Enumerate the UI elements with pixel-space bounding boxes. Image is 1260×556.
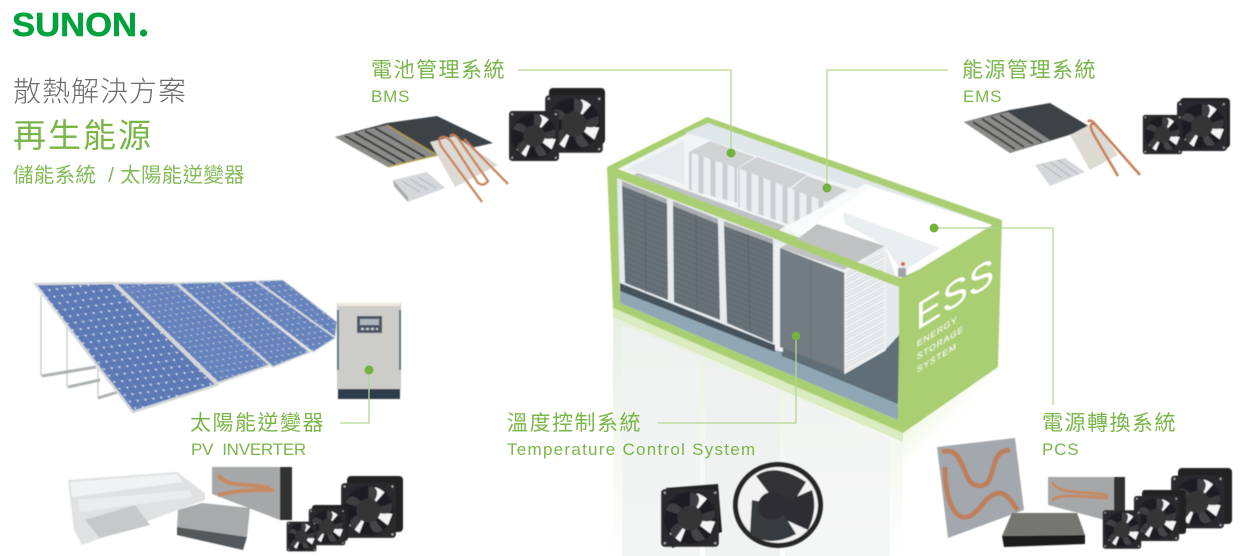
container roof opening: white interior — [617, 123, 992, 278]
right room — [775, 184, 992, 352]
small device — [898, 268, 906, 277]
BMS components — [335, 116, 508, 202]
inverter unit — [337, 303, 401, 399]
inverter dot — [364, 366, 374, 374]
inverter body — [337, 303, 401, 390]
BMS dot — [726, 148, 736, 158]
title block — [13, 76, 245, 187]
EMS dot — [822, 184, 832, 192]
temperature control fans — [661, 462, 823, 548]
temperature control label — [507, 332, 800, 459]
inverter base — [338, 389, 400, 399]
partition wall — [785, 184, 870, 235]
logo: SUNON: SUNON — [12, 6, 137, 43]
PCS english label: PCS — [1042, 440, 1079, 459]
support frame — [41, 295, 118, 398]
floor — [620, 290, 898, 420]
PCS chinese heading: 電源轉換系統 — [1042, 412, 1177, 435]
heat sink — [177, 503, 250, 537]
battery plate — [335, 116, 493, 167]
SYSTEM: SYSTEM — [917, 341, 957, 375]
ENERGY: ENERGY — [917, 314, 958, 349]
ESS label — [916, 247, 995, 375]
front opening — [617, 178, 899, 420]
temperature control cabinet — [780, 224, 885, 373]
BMS chinese heading: 電池管理系統 — [371, 59, 506, 82]
PCS fans — [1103, 468, 1232, 549]
panel 4 — [222, 281, 335, 352]
square fan — [666, 484, 722, 548]
rack 2 — [673, 205, 720, 320]
PCS dot — [930, 224, 938, 232]
back server racks — [689, 141, 847, 225]
reflection under ESS container — [613, 308, 998, 556]
PV inverter label — [190, 412, 325, 459]
PV inverter components — [68, 467, 292, 550]
PV english label: PV INVERTER — [191, 440, 307, 459]
green beam over right room and cabinet — [780, 233, 900, 287]
small heat sink — [1035, 158, 1085, 186]
rack C — [791, 189, 827, 223]
EMS english label: EMS — [963, 87, 1002, 106]
panel 2 — [115, 283, 270, 383]
PCS leader line — [934, 228, 1053, 405]
subheading: 儲能系統 / 太陽能逆變器 — [13, 164, 245, 187]
temperature control english label: Temperature Control System — [507, 440, 756, 459]
heading: 再生能源: 再生能源 — [13, 117, 153, 154]
rack 3 — [724, 225, 773, 343]
EMS fans — [1143, 98, 1230, 154]
temperature dot — [792, 332, 800, 340]
panel 3 — [177, 282, 310, 367]
copper tubes cold plate — [1070, 122, 1118, 170]
temperature leader line — [658, 336, 796, 423]
PV fans — [287, 476, 403, 551]
solar panel array — [35, 280, 337, 412]
enclosure — [68, 472, 205, 545]
rack A — [689, 152, 737, 203]
BMS fans — [509, 88, 605, 161]
EMS label — [822, 59, 1097, 192]
ESS container illustration — [607, 117, 1002, 433]
PV chinese heading: 太陽能逆變器 — [190, 412, 325, 435]
rack 1 — [622, 185, 668, 300]
cold plate with copper tubes — [430, 136, 498, 187]
heat pipe block — [212, 467, 292, 520]
small heat sink — [393, 172, 445, 202]
front ledge grey — [625, 173, 785, 233]
EMS components — [964, 103, 1140, 186]
inverter display — [357, 316, 382, 333]
BMS leader line — [518, 70, 731, 153]
battery plate — [964, 103, 1092, 153]
ESS big text: ESS — [916, 247, 995, 339]
back wall strip — [685, 123, 992, 235]
panel 1 — [35, 283, 217, 412]
heading: 散熱解決方案: 散熱解決方案 — [13, 76, 187, 107]
STORAGE: STORAGE — [917, 324, 964, 362]
BMS label — [371, 59, 736, 158]
front battery racks — [620, 181, 775, 352]
BMS english label: BMS — [371, 87, 410, 106]
green front beam — [607, 167, 900, 287]
inverter leader line — [340, 370, 369, 423]
heat pipe block — [1048, 477, 1125, 520]
EMS chinese heading: 能源管理系統 — [962, 59, 1097, 82]
heat pipe plate — [937, 438, 1024, 538]
EMS leader line — [827, 70, 948, 188]
panel 5 — [257, 280, 337, 337]
temperature control chinese heading: 溫度控制系統 — [507, 412, 642, 435]
rack B — [738, 168, 790, 225]
container green shell — [607, 117, 1002, 433]
round fan — [733, 462, 823, 548]
black block — [1002, 513, 1085, 536]
PCS label — [930, 224, 1177, 459]
PCS components — [937, 438, 1125, 547]
